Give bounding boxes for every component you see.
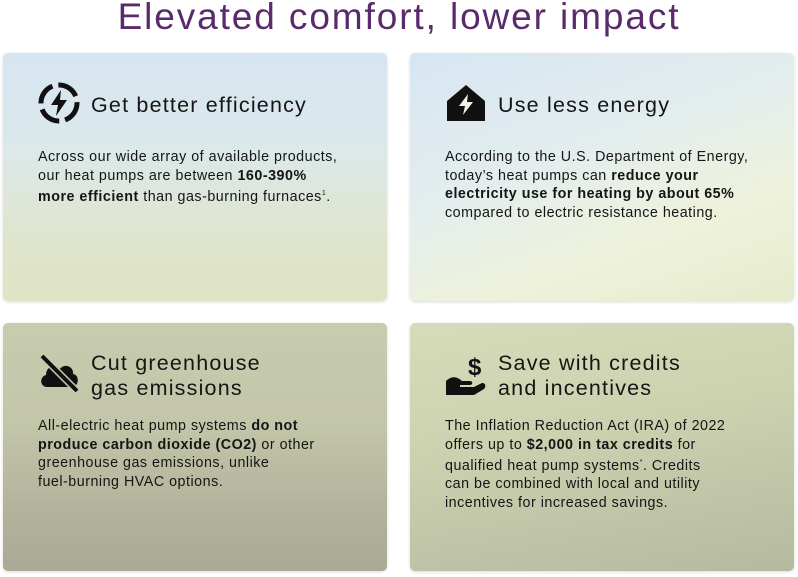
icon: hand with dollar bbox=[446, 354, 486, 395]
text: compared to electric resistance heating. bbox=[445, 204, 718, 220]
heading: Use less energy bbox=[498, 93, 670, 117]
text bbox=[445, 418, 725, 511]
text: produce carbon dioxide (CO2) or other bbox=[38, 436, 315, 452]
icon: house bolt bbox=[447, 85, 485, 121]
text bbox=[38, 149, 337, 205]
panel: efficiency bbox=[3, 53, 387, 301]
heading: and incentives bbox=[498, 376, 652, 400]
text: The Inflation Reduction Act (IRA) of 2022 bbox=[445, 418, 725, 434]
text: our heat pumps are between 160-390% bbox=[38, 168, 307, 184]
text bbox=[38, 418, 315, 490]
icon: lightning circle bbox=[38, 82, 80, 124]
text: incentives for increased savings. bbox=[445, 495, 668, 511]
text: According to the U.S. Department of Energy, bbox=[445, 149, 748, 165]
text: offers up to $2,000 in tax credits for bbox=[445, 436, 696, 452]
icon: crossed cloud bbox=[40, 354, 78, 392]
icon: hand with dollar: $ bbox=[468, 354, 482, 381]
panel: credits bbox=[410, 323, 794, 571]
text: today’s heat pumps can reduce your bbox=[445, 168, 699, 184]
heading bbox=[91, 351, 261, 400]
text: electricity use for heating by about 65% bbox=[445, 186, 734, 202]
heading bbox=[498, 351, 681, 400]
text: can be combined with local and utility bbox=[445, 476, 700, 492]
heading: gas emissions bbox=[91, 376, 243, 400]
heading: Save with credits bbox=[498, 351, 681, 375]
text bbox=[445, 149, 748, 220]
text: greenhouse gas emissions, unlike bbox=[38, 455, 269, 471]
heading: Cut greenhouse bbox=[91, 351, 261, 375]
text: fuel-burning HVAC options. bbox=[38, 474, 223, 490]
heading: Get better efficiency bbox=[91, 93, 307, 117]
text: All-electric heat pump systems do not bbox=[38, 418, 298, 434]
panel: energy bbox=[410, 53, 794, 301]
text: qualified heat pump systems*. Credits bbox=[445, 458, 701, 474]
panel: emissions bbox=[3, 323, 387, 571]
text: more efficient than gas-burning furnaces1. bbox=[38, 189, 331, 205]
text: Across our wide array of available products, bbox=[38, 149, 337, 165]
